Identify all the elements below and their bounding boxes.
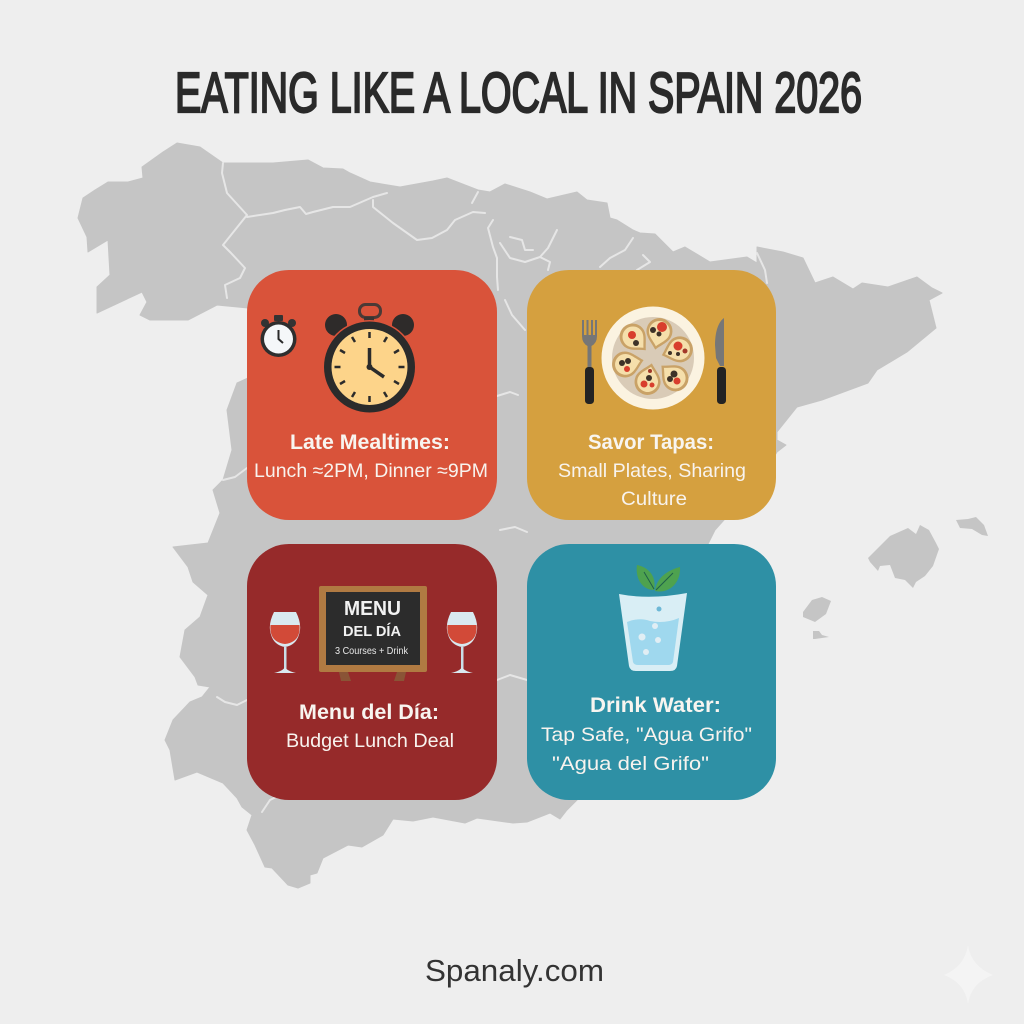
panel: menu del dia: [247, 544, 497, 800]
icon: small stopwatch: [260, 315, 296, 357]
icon: large stopwatch: [322, 304, 416, 414]
text: culture: Culture: [621, 488, 687, 510]
text: agua del grifo: "Agua del Grifo": [552, 753, 709, 775]
text: board heading del dia: DEL DÍA: [343, 623, 401, 640]
heading: savor tapas: Savor Tapas:: [588, 431, 714, 454]
footer website: Spanaly.com: [425, 953, 604, 988]
text: small plates: Small Plates, Sharing: [558, 460, 746, 482]
panel: late mealtimes: [247, 270, 497, 520]
icon: fork: [582, 320, 597, 404]
text: board note: 3 Courses + Drink: [335, 646, 409, 657]
icon: left wine glass: [270, 612, 300, 673]
icon: chalkboard: [319, 586, 427, 681]
icon: sparkle watermark: [944, 945, 993, 1004]
text: board heading menu: MENU: [344, 598, 401, 620]
icon: glass of water with mint: [619, 565, 687, 671]
heading: menu del dia: Menu del Día:: [299, 701, 439, 724]
map of Spain: [78, 143, 988, 888]
panel: drink water: [527, 544, 776, 800]
text: budget lunch deal: Budget Lunch Deal: [286, 730, 454, 752]
heading: late mealtimes: Late Mealtimes:: [290, 431, 450, 454]
icon: knife: [715, 318, 726, 404]
icon: right wine glass: [447, 612, 477, 673]
panel: savor tapas: [527, 270, 776, 520]
heading: drink water: Drink Water:: [590, 694, 721, 717]
text: tap safe: Tap Safe, "Agua Grifo": [541, 724, 752, 746]
icon: plate of tapas: [602, 306, 704, 410]
text: meal hours: Lunch ≈2PM, Dinner ≈9PM: [254, 460, 488, 482]
